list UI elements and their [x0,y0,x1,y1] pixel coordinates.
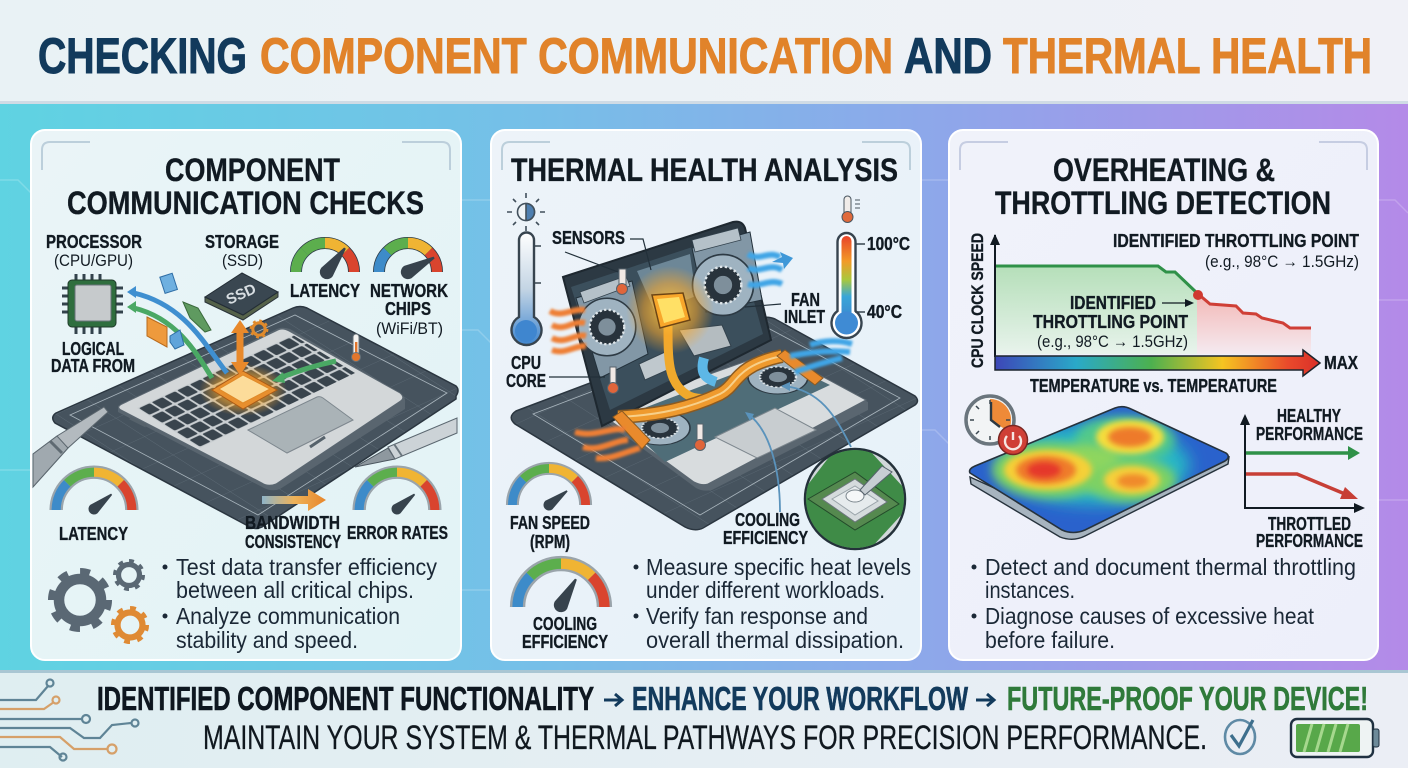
bullet list [634,554,911,653]
gauge: network chips [379,243,438,282]
illustration: laptop on mat [53,306,458,528]
bullet list [972,554,1356,653]
icon: sun [507,193,545,231]
icon: gears [53,561,146,641]
icon: bottom fans [630,411,690,445]
gauge: error rates [359,472,435,517]
component labels: PROCESSOR [46,232,142,252]
heading: THROTTLING DETECTION [995,185,1331,221]
arrow: bandwidth [262,489,326,511]
gauge: latency top [296,243,354,282]
airflow orange [550,310,640,458]
heading [67,152,424,221]
temperature probes on laptop [608,269,706,450]
icon: soldering tool [33,407,108,487]
inset: thermal paste [804,448,906,550]
heading [995,152,1331,221]
bullet list: Analyze communication [176,603,400,629]
chart: healthy vs throttled performance: THROTTLED [1268,514,1351,534]
bullet list: before failure. [985,627,1115,653]
component labels: LOGICAL [62,339,124,359]
icon: stopwatch with power [966,396,1028,454]
title: COMPONENT COMMUNICATION [260,28,893,84]
heat pipe [613,325,823,449]
component labels: CONSISTENCY [245,532,341,552]
chart: healthy vs throttled performance: PERFORMANCE [1256,531,1363,551]
icon: processor chip [62,274,123,334]
component labels: BANDWIDTH [245,513,340,533]
chart: healthy vs throttled performance: PERFORMANCE [1256,424,1363,444]
icon: small gear [251,321,267,337]
temperature gradient arrow [995,350,1320,376]
title bar [0,0,1408,104]
panel: component communication checks [31,130,461,660]
thermometer: 40 to 100 degrees [832,233,865,338]
gauge: latency bottom [56,472,132,517]
icon: battery [1291,719,1379,757]
chart: clock speed vs temperature [968,231,1359,396]
icon: pen probe [355,418,457,467]
arrows to processor [127,286,336,383]
title: AND [904,28,992,84]
bullet list: under different workloads. [646,577,885,603]
bullet list: Measure specific heat levels [646,554,911,580]
gauge: cooling efficiency [518,564,604,615]
icon: temperature probe [352,334,360,362]
component labels [46,232,448,552]
thermal labels: COOLING [533,614,597,634]
panel: overheating and throttling detection [949,130,1378,660]
footer headline: IDENTIFIED COMPONENT FUNCTIONALITY [97,680,594,717]
thermal labels: 40°C [867,302,902,322]
thermal labels: EFFICIENCY [522,632,608,652]
callout: throttling point: THROTTLING POINT [1033,312,1188,332]
thermal labels: INLET [784,307,825,327]
icon: check circle [1225,720,1255,754]
gauges [56,243,438,517]
thermal labels: FAN SPEED [510,513,590,533]
y axis label: CPU CLOCK SPEED [968,233,987,368]
heading: COMPONENT [165,152,340,188]
bullet list [162,554,437,653]
bullet list: Detect and document thermal throttling [985,554,1356,580]
thermal labels: CPU [511,353,541,373]
component labels: DATA FROM [51,356,135,376]
gauge: fan speed [512,468,586,513]
bullet list: between all critical chips. [176,577,414,603]
icon: right fan [692,254,754,316]
icon: SSD: SSD [224,280,259,308]
component labels: (SSD) [222,251,263,270]
thermal labels: FAN [791,290,820,310]
icon: left fan [578,298,636,356]
component labels: (WiFi/BT) [376,319,443,338]
illustration: laptop heat map [970,407,1229,539]
thermal labels: COOLING [735,510,800,530]
bullet list: Test data transfer efficiency [176,554,437,580]
component labels: ERROR RATES [347,523,448,543]
heading: OVERHEATING & [1053,152,1275,188]
bullet list: Verify fan response and [646,603,868,629]
component labels: (CPU/GPU) [54,251,133,270]
heading: THERMAL HEALTH ANALYSIS [511,152,898,188]
callout: throttling point [1033,293,1194,351]
callout: throttling point: IDENTIFIED [1070,293,1156,313]
arrows: cooling callouts [745,382,851,512]
thermal labels: (RPM) [530,532,570,552]
bullet list: Diagnose causes of excessive heat [985,603,1315,629]
callout: throttling point top: (e.g., 98°C → 1.5GHz) [1205,252,1359,271]
bullet list: overall thermal dissipation. [646,627,904,653]
component labels: CHIPS [385,299,431,319]
title [38,28,1372,84]
chart: healthy vs throttled performance [1240,406,1365,551]
footer band [0,670,1408,768]
thermal labels [506,228,910,652]
component labels: LATENCY [59,524,128,544]
chart: healthy vs throttled performance: HEALTHY [1277,406,1341,426]
icon: small thermometer [842,196,860,222]
component labels: STORAGE [205,232,279,252]
footer headline: ENHANCE YOUR WORKFLOW [632,680,969,717]
arrow: blue exhaust [772,252,793,269]
callout: throttling point top: IDENTIFIED THROTTLING POINT [1113,231,1359,251]
thermal labels: CORE [506,371,546,391]
thermal labels: SENSORS [552,228,625,248]
airflow blue [748,254,852,372]
callout: throttling point: (e.g., 98°C → 1.5GHz) [1037,332,1188,351]
thermometer: cold [512,232,542,345]
callout: throttling point top [1113,231,1359,271]
bullet list: instances. [985,577,1075,603]
inner cooling plate [618,358,830,462]
thermal labels: EFFICIENCY [723,528,808,548]
icon: glowing CPU [626,266,714,354]
chart: clock speed vs temperature: TEMPERATURE vs. TEMPERATURE [1030,376,1277,396]
thermal labels: 100°C [867,234,910,254]
illustration: open laptop with heat pipes [511,222,918,530]
chart: clock speed vs temperature: MAX [1324,353,1358,373]
title: CHECKING [38,28,247,84]
heading: COMMUNICATION CHECKS [67,185,424,221]
icon: circuit traces [0,680,138,760]
panel: thermal health analysis [491,130,921,660]
icon: SSD [205,273,278,320]
bullet list: stability and speed. [176,627,358,653]
component labels: NETWORK [370,281,448,301]
footer headline [97,680,1368,717]
icon: glowing central chip [199,364,287,416]
icon: floating data chips [147,273,211,349]
callout lines [549,239,781,377]
component labels: LATENCY [290,281,360,301]
